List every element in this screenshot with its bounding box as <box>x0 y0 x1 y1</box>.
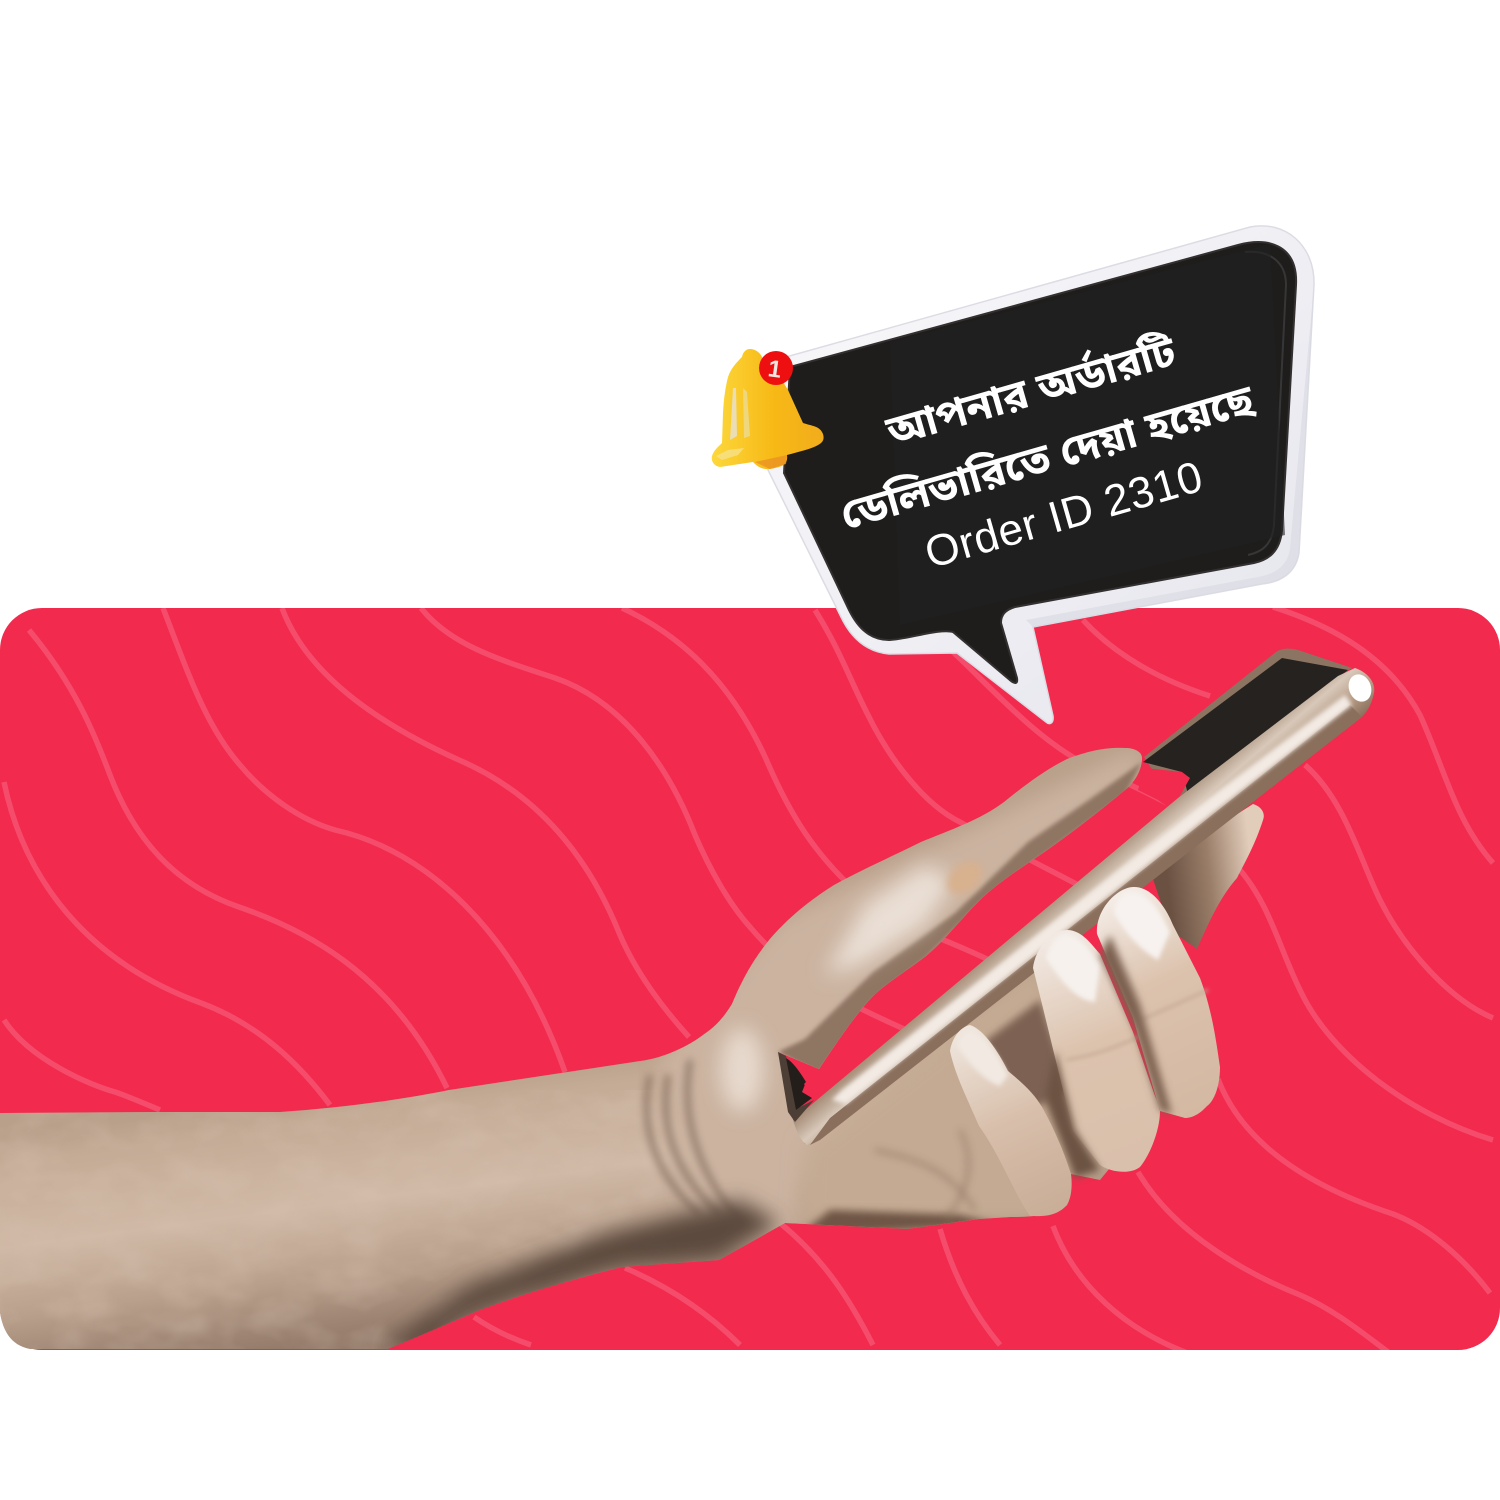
bell clapper shade <box>755 455 787 469</box>
text line: order id: Order ID 2310 <box>919 452 1209 578</box>
bubble body sheen <box>890 244 1285 625</box>
phone side body <box>793 668 1374 1145</box>
back of hand tone <box>660 748 1142 1250</box>
wavy line pattern <box>4 607 1493 1354</box>
palm crease shadow <box>806 1206 990 1229</box>
phone corner glare <box>1345 671 1375 705</box>
bubble inner bevel shine <box>1245 252 1286 555</box>
palm base highlight <box>720 1028 764 1112</box>
red cutout under screen <box>1138 768 1190 810</box>
text line: order status second line: ডেলিভারিতে দেয়া হয়েছে <box>835 374 1260 539</box>
nail <box>1046 934 1100 1002</box>
palm lines <box>875 1130 975 1220</box>
bubble outer white rim <box>768 226 1314 724</box>
bubble rim shading <box>1026 285 1314 627</box>
bubble dark body <box>784 242 1296 683</box>
arm lower shadow <box>380 1200 780 1349</box>
red gap near palm <box>804 1069 832 1097</box>
phone dark inner edge <box>786 1058 812 1110</box>
badge number: 1 <box>766 355 783 384</box>
nail <box>1114 892 1170 960</box>
bell body <box>712 349 824 469</box>
skin mottling <box>20 1093 582 1349</box>
icon: notification bell <box>712 349 824 469</box>
text line: order status first line: আপনার অর্ডারটি <box>880 325 1181 455</box>
knuckle glow <box>944 862 982 896</box>
bell rim shine <box>716 448 744 460</box>
finger: pinky <box>950 1025 1072 1216</box>
phone <box>778 649 1375 1145</box>
bell highlight right <box>743 388 750 438</box>
phone lower edge shade <box>810 705 1362 1145</box>
message text <box>835 325 1260 578</box>
gap shadow between fingers <box>1045 1050 1100 1178</box>
wrist wrinkles <box>647 1060 745 1225</box>
web skin tone near fingers <box>985 998 1064 1108</box>
phone highlight strip <box>832 695 1352 1104</box>
hand: index finger behind phone <box>1150 804 1264 949</box>
phone dark screen <box>1143 658 1348 794</box>
hand: arm and palm with thumb <box>0 748 1160 1350</box>
thumb highlight <box>825 865 955 975</box>
finger: middle (far) <box>1097 887 1220 1118</box>
panel: red background <box>0 608 1500 1350</box>
palm tone <box>806 978 1073 1229</box>
phone bottom frame in palm <box>778 1052 814 1122</box>
hand: front fingers on phone <box>950 887 1220 1216</box>
crease <box>1066 1036 1140 1060</box>
phone back frame <box>1144 649 1352 798</box>
nail <box>957 1030 1008 1086</box>
bell highlight <box>730 388 737 440</box>
thumb underside shadow <box>778 762 1142 1075</box>
finger: ring <box>1033 930 1160 1172</box>
hand shading <box>0 748 1142 1350</box>
icon: speech bubble notification <box>768 226 1314 724</box>
crease <box>1140 990 1208 1020</box>
gap shadow between ring and middle <box>1100 935 1172 1115</box>
